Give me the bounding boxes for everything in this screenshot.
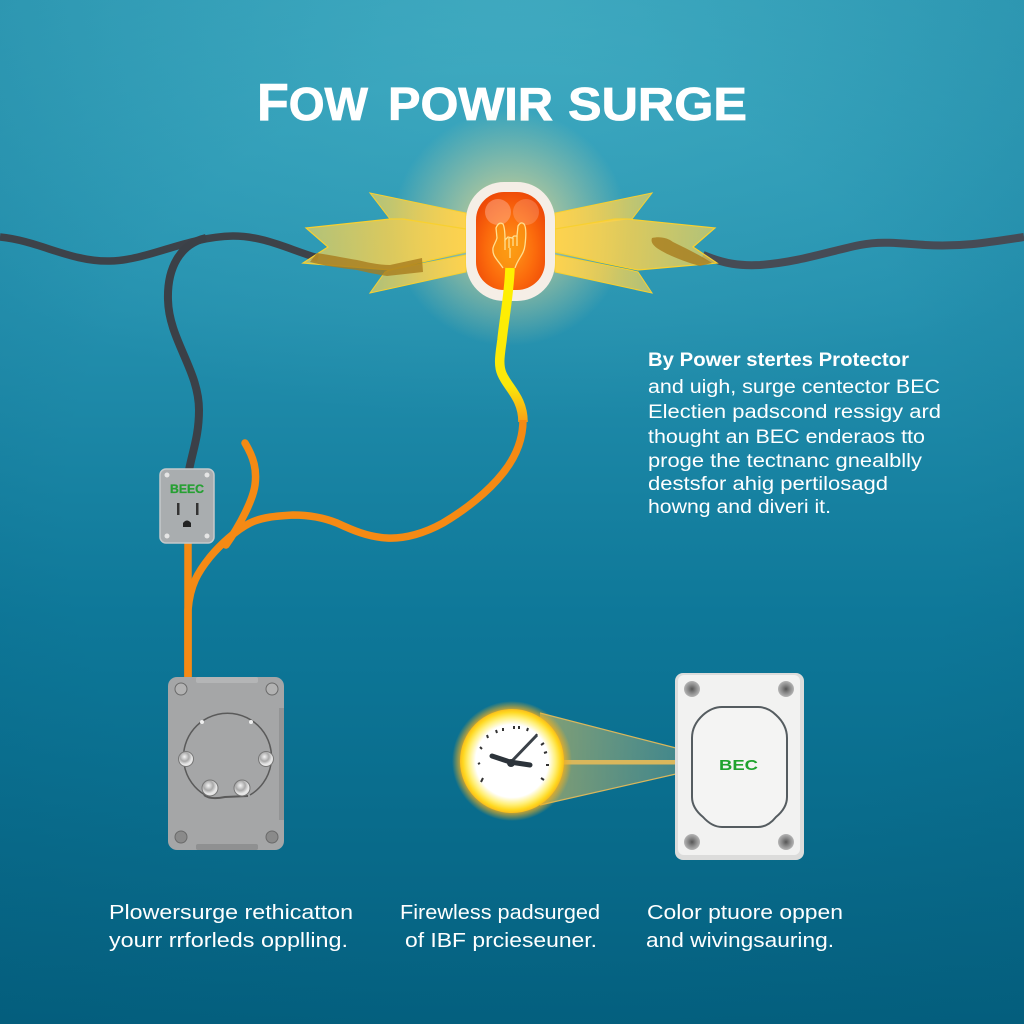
description text block: Electien padscond ressigy ard <box>648 402 941 423</box>
right dark wire <box>703 237 1024 265</box>
description text block: By Power stertes Protector <box>648 350 910 371</box>
white BEC box <box>675 673 804 860</box>
gauge tick marks <box>478 726 549 782</box>
caption: grey box <box>109 902 353 952</box>
outlet label: BEEC <box>170 482 204 496</box>
title: FOW <box>257 74 369 132</box>
description text block: and uigh, surge centector BEC <box>648 377 940 398</box>
wall outlet <box>160 469 214 543</box>
surge burst right <box>555 193 717 293</box>
title: POWIR <box>388 78 553 130</box>
caption: gauge: Firewless padsurged <box>400 902 600 924</box>
caption: grey box: yourr rrforleds opplling. <box>109 930 348 952</box>
yellow cable <box>500 268 523 422</box>
caption: gauge: of IBF prcieseuner. <box>405 930 597 952</box>
surge lamp <box>466 182 555 301</box>
icon: hand filament <box>493 223 526 268</box>
description text block: howng and diveri it. <box>648 497 831 518</box>
caption: white box: Color ptuore oppen <box>647 902 843 924</box>
left dark wire <box>0 236 318 261</box>
description text block <box>648 350 941 518</box>
orange cable <box>188 420 523 677</box>
lamp highlights <box>485 199 539 225</box>
orange drop from outlet <box>184 540 192 680</box>
caption: white box <box>646 902 843 952</box>
branch dark wire to outlet <box>168 238 206 470</box>
gauge hands <box>492 735 537 767</box>
grey junction box <box>168 677 284 850</box>
box label: BEC <box>719 757 758 774</box>
orange branch <box>226 443 256 545</box>
title: SURGE <box>568 78 747 130</box>
description text block: destsfor ahig pertilosagd <box>648 474 888 495</box>
glow halo <box>392 110 628 346</box>
caption: grey box: Plowersurge rethicatton <box>109 902 353 924</box>
title <box>257 74 747 132</box>
description text block: proge the tectnanc gnealblly <box>648 451 923 472</box>
light beams from gauge to box <box>540 713 676 805</box>
caption: gauge <box>400 902 600 952</box>
description text block: thought an BEC enderaos tto <box>648 427 925 448</box>
surge burst left <box>303 193 466 293</box>
caption: white box: and wivingsauring. <box>646 930 834 952</box>
gauge <box>452 701 572 821</box>
